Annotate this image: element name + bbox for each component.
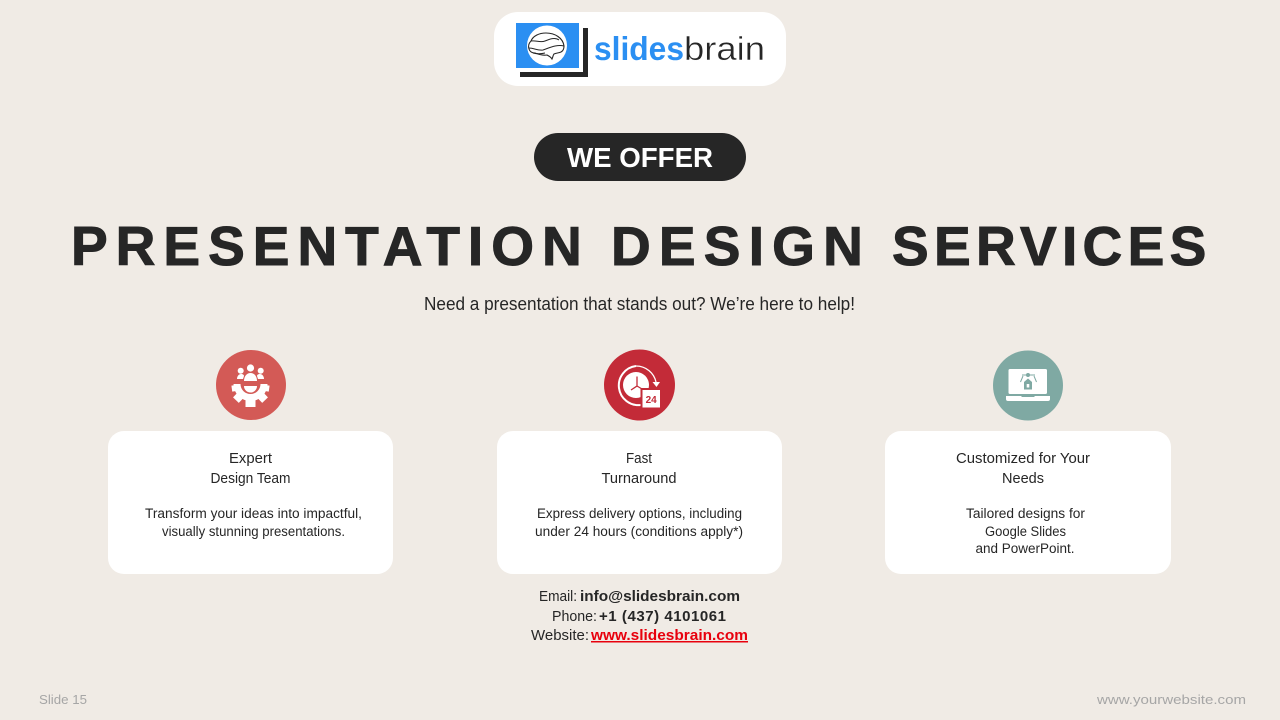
icon: 24 hour clock bbox=[604, 350, 675, 420]
card body: Google Slides bbox=[985, 524, 1066, 539]
panel: customized for your needs bbox=[885, 431, 1171, 574]
card body: under 24 hours (conditions apply*) bbox=[535, 524, 743, 539]
logo wordmark: slides bbox=[594, 30, 684, 67]
logo wordmark bbox=[594, 30, 765, 67]
card body: Tailored designs for bbox=[966, 506, 1085, 521]
card heading: Turnaround bbox=[602, 471, 676, 487]
icon: 24 hour clock: 24 bbox=[646, 395, 657, 406]
icon: laptop with design tool bbox=[993, 350, 1063, 420]
card heading: Customized for Your bbox=[956, 451, 1090, 467]
card heading: Expert bbox=[229, 451, 272, 467]
panel: fast turnaround bbox=[497, 431, 782, 574]
card body bbox=[145, 506, 362, 539]
card heading: Fast bbox=[626, 451, 652, 467]
contact details: www.slidesbrain.com bbox=[590, 627, 748, 644]
card heading bbox=[210, 451, 290, 487]
logo badge bbox=[494, 12, 786, 86]
card body: Transform your ideas into impactful, bbox=[145, 506, 362, 521]
card body: and PowerPoint. bbox=[976, 541, 1074, 556]
card heading: Needs bbox=[1002, 471, 1044, 487]
title: SERVICES bbox=[892, 215, 1212, 277]
panel: expert design team bbox=[108, 431, 393, 574]
card body: visually stunning presentations. bbox=[162, 524, 345, 539]
contact details: Email: bbox=[539, 588, 577, 605]
title bbox=[71, 215, 1212, 277]
icon: team and gear bbox=[216, 350, 286, 420]
card body bbox=[966, 506, 1085, 556]
badge: we offer bbox=[534, 133, 746, 181]
slide number: Slide 15 bbox=[39, 692, 87, 707]
contact details bbox=[531, 588, 748, 644]
card heading: Design Team bbox=[210, 471, 290, 487]
title: DESIGN bbox=[611, 215, 871, 277]
contact details: Website: bbox=[531, 627, 589, 644]
website footer: www.yourwebsite.com bbox=[1096, 692, 1246, 707]
title: PRESENTATION bbox=[71, 215, 590, 277]
logo wordmark: brain bbox=[684, 30, 765, 67]
card body bbox=[535, 506, 743, 539]
contact details: info@slidesbrain.com bbox=[580, 588, 740, 605]
contact details: Phone: bbox=[552, 608, 597, 625]
card body: Express delivery options, including bbox=[537, 506, 742, 521]
contact details: +1 (437) 4101061 bbox=[599, 608, 726, 625]
badge: we offer: WE OFFER bbox=[567, 142, 713, 173]
card heading bbox=[602, 451, 676, 487]
logo icon: brain bbox=[516, 23, 588, 77]
card heading bbox=[956, 451, 1090, 487]
subtitle: Need a presentation that stands out? We’re here to help! bbox=[424, 294, 855, 314]
